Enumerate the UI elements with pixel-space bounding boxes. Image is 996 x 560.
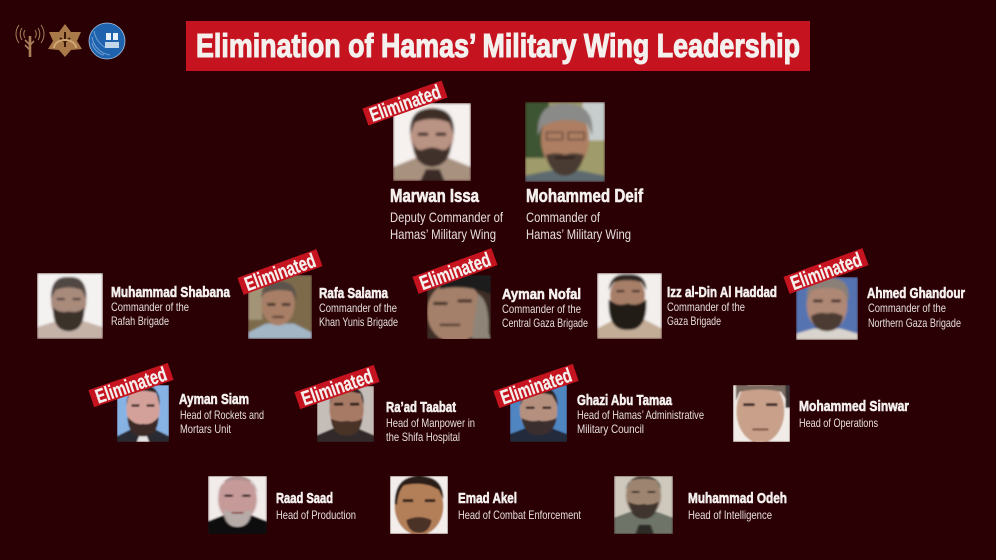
role: Head of Manpower in — [386, 416, 475, 430]
eliminated tag: Eliminated — [788, 249, 865, 295]
photo — [510, 385, 567, 442]
role — [111, 300, 189, 328]
name: Muhammad Shabana — [111, 284, 231, 301]
role: Commander of — [526, 209, 600, 225]
person: Muhammad Odeh — [614, 475, 787, 534]
role: Head of Hamas’ Administrative — [577, 408, 704, 422]
role: Head of Rockets and — [180, 408, 264, 422]
role: the Shifa Hospital — [386, 430, 460, 444]
role — [180, 408, 264, 436]
role: Commander of the — [502, 302, 581, 316]
name: Ra’ad Taabat — [386, 399, 456, 416]
role — [667, 300, 745, 328]
person: Muhammad Shabana — [37, 273, 231, 339]
person: Mohammed Sinwar — [733, 379, 909, 443]
eliminated tag — [237, 248, 324, 298]
role — [319, 301, 398, 329]
role — [502, 302, 588, 330]
photo — [317, 386, 374, 442]
person: Emad Akel — [390, 476, 582, 535]
eliminated tag — [783, 247, 870, 297]
person: Raad Saad — [208, 476, 356, 534]
photo — [525, 102, 605, 182]
photo — [733, 385, 790, 442]
photo — [208, 476, 267, 534]
photo — [597, 273, 662, 339]
name: Marwan Issa — [390, 186, 480, 206]
name: Ghazi Abu Tamaa — [577, 392, 672, 409]
person: Ra'ad Taabat — [294, 364, 475, 444]
name: Emad Akel — [458, 490, 517, 507]
name: Rafa Salama — [319, 285, 389, 302]
name: Mohammed Deif — [526, 186, 644, 206]
role — [526, 209, 631, 242]
role: Hamas’ Military Wing — [526, 226, 631, 242]
role: Commander of the — [319, 301, 397, 315]
eliminated tag: Eliminated — [93, 363, 170, 408]
role: Rafah Brigade — [111, 314, 169, 328]
photo — [117, 385, 169, 442]
name: Izz al-Din Al Haddad — [667, 284, 777, 301]
photo — [37, 273, 103, 339]
role: Head of Combat Enforcement — [458, 508, 582, 522]
role: Northern Gaza Brigade — [868, 316, 961, 330]
photo — [393, 103, 471, 181]
role: Khan Yunis Brigade — [319, 315, 398, 329]
photo — [427, 275, 491, 339]
eliminated tag — [294, 364, 381, 412]
role: Hamas’ Military Wing — [390, 226, 496, 242]
role: Central Gaza Brigade — [502, 316, 588, 330]
title banner: Elimination of Hamas’ Military Wing Leadership — [196, 27, 800, 64]
icon: blue circle badge — [89, 23, 125, 59]
role — [386, 416, 475, 444]
eliminated tag: Eliminated — [367, 81, 444, 127]
logos — [16, 23, 125, 59]
eliminated tag — [88, 362, 175, 410]
person: Ayman Siam — [88, 362, 264, 442]
title banner — [186, 21, 810, 71]
role: Deputy Commander of — [390, 209, 503, 225]
name: Mohammed Sinwar — [799, 398, 909, 415]
role: Head of Production — [276, 508, 356, 522]
name: Raad Saad — [276, 490, 333, 507]
eliminated tag — [362, 80, 449, 128]
eliminated tag: Eliminated — [498, 364, 575, 409]
name: Muhammad Odeh — [688, 490, 787, 507]
person: Ahmed Ghandour — [783, 247, 965, 340]
role: Head of Intelligence — [688, 508, 772, 522]
person: Marwan Issa — [362, 80, 503, 242]
person: Mohammed Deif — [525, 102, 644, 242]
person: Ghazi Abu Tamaa — [493, 363, 704, 442]
role: Commander of the — [667, 300, 745, 314]
person: Izz al-Din Al Haddad — [597, 273, 777, 339]
role: Head of Operations — [799, 416, 878, 430]
role — [868, 301, 961, 330]
icon: star emblem — [48, 24, 82, 57]
photo — [614, 476, 673, 534]
photo — [796, 277, 858, 340]
name: Ayman Siam — [179, 391, 249, 408]
eliminated tag — [412, 247, 499, 297]
person: Ayman Nofal — [412, 247, 588, 343]
role: Commander of the — [868, 301, 946, 315]
role: Military Council — [577, 422, 644, 436]
role — [390, 209, 503, 242]
eliminated tag: Eliminated — [242, 250, 319, 296]
role: Commander of the — [111, 300, 189, 314]
photo — [248, 275, 312, 339]
role: Gaza Brigade — [667, 314, 721, 328]
eliminated tag: Eliminated — [417, 249, 494, 295]
role — [577, 408, 704, 436]
role: Mortars Unit — [180, 422, 232, 436]
person: Rafa Salama — [237, 248, 398, 339]
icon: antenna emblem — [16, 25, 44, 57]
eliminated tag — [493, 363, 580, 411]
photo — [390, 476, 448, 534]
name: Ahmed Ghandour — [867, 285, 965, 302]
name: Ayman Nofal — [502, 286, 581, 303]
eliminated tag: Eliminated — [299, 365, 376, 410]
